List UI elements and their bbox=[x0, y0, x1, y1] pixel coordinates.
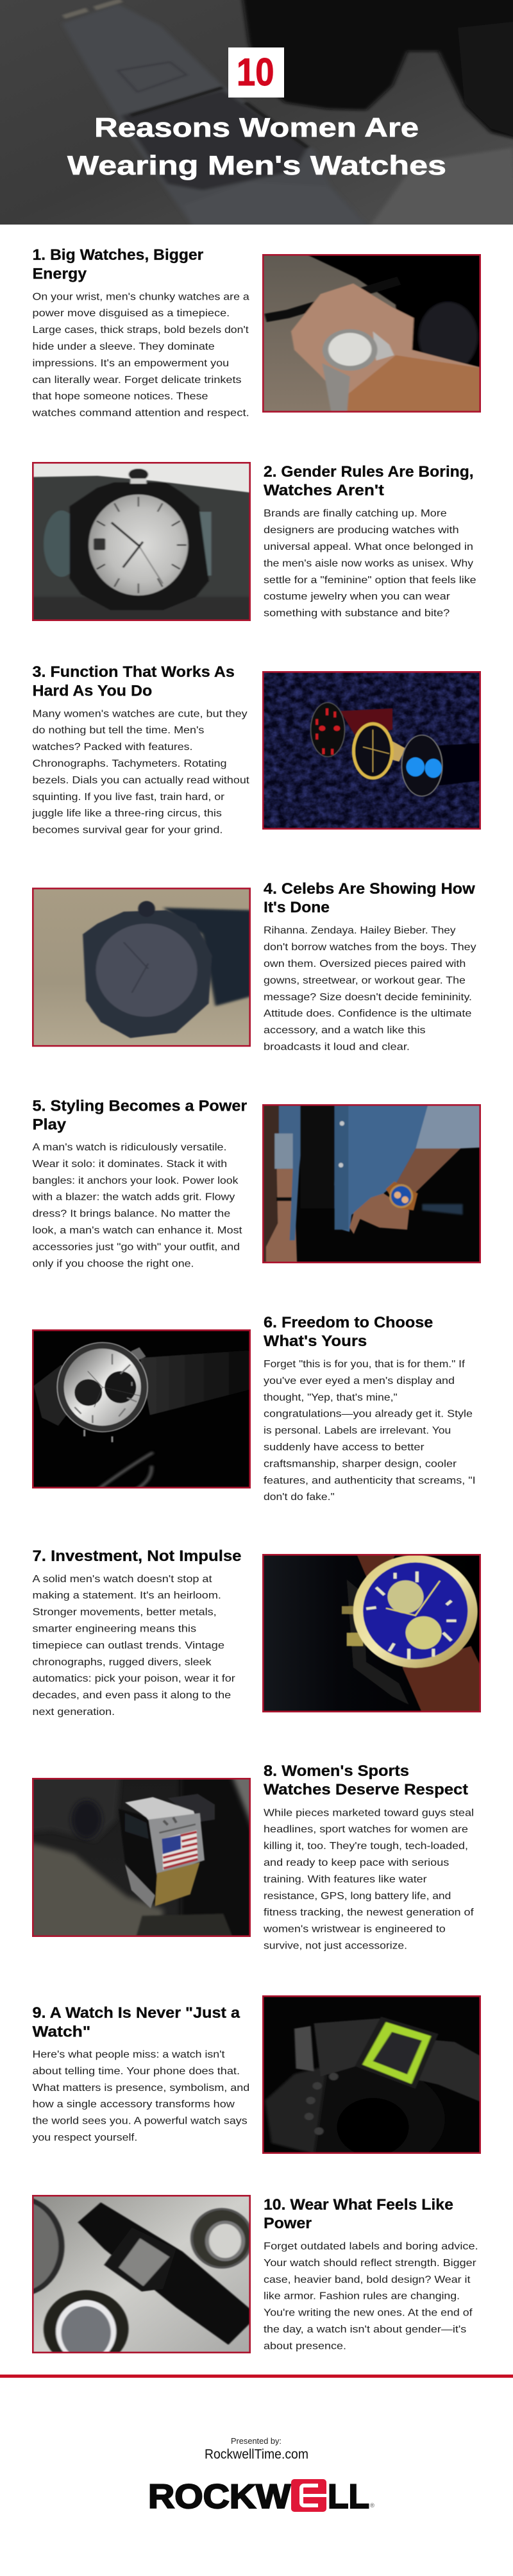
heading bbox=[264, 1762, 468, 1798]
heading: 2. Gender Rules Are Boring, bbox=[264, 463, 474, 481]
body text: about telling time. Your phone does that. bbox=[32, 2066, 240, 2077]
body text: next generation. bbox=[32, 1707, 115, 1718]
heading: Power bbox=[264, 2215, 312, 2232]
panel: reason 3 bbox=[31, 663, 484, 836]
photo: neon green square watch on gear bbox=[262, 1995, 484, 2172]
title bbox=[67, 112, 446, 180]
heading: What's Yours bbox=[264, 1333, 367, 1350]
body text: Wear it solo: it dominates. Stack it with bbox=[32, 1159, 227, 1170]
body text: is personal. Labels are irrelevant. You bbox=[264, 1426, 451, 1437]
body text: message? Size doesn't decide femininity. bbox=[264, 992, 472, 1003]
body text: women's wristwear is engineered to bbox=[263, 1924, 446, 1935]
body text: bezels. Dials you can actually read without bbox=[32, 775, 249, 786]
heading bbox=[32, 246, 203, 283]
body text: the men's aisle now works as unisex. Why bbox=[264, 558, 473, 569]
heading bbox=[264, 463, 474, 499]
heading bbox=[32, 2004, 240, 2040]
panel: reason 6 bbox=[32, 1314, 476, 1503]
body text: smarter engineering means this bbox=[32, 1623, 196, 1635]
body text: craftsmanship, sharper design, cooler bbox=[264, 1458, 457, 1469]
photo: gold watch with blue dial bbox=[262, 1554, 482, 1712]
panel: reason 2 bbox=[29, 459, 476, 626]
heading bbox=[264, 880, 475, 916]
body text: dress? It brings balance. No matter the bbox=[32, 1209, 230, 1220]
body text: own them. Oversized pieces paired with bbox=[264, 959, 466, 969]
heading: 10. Wear What Feels Like bbox=[264, 2196, 453, 2213]
body text bbox=[263, 1807, 474, 1952]
body text: Forget outdated labels and boring advice. bbox=[264, 2241, 478, 2252]
photo: wrist on motorcycle handlebar bbox=[262, 249, 487, 419]
body text bbox=[264, 1359, 476, 1503]
body text: hide under a sleeve. They dominate bbox=[32, 341, 215, 352]
body text: What matters is presence, symbolism, and bbox=[32, 2083, 249, 2094]
body text: While pieces marketed toward guys steal bbox=[264, 1807, 474, 1818]
body text: costume jewelry when you can wear bbox=[264, 592, 451, 602]
photo: chronograph with silver dial on black bbox=[32, 1329, 255, 1495]
body text: congratulations—you already get it. Style bbox=[264, 1409, 473, 1420]
body text: case, heavier band, bold design? Wear it bbox=[264, 2274, 471, 2285]
body text: the day, a watch isn't about gender—it's bbox=[264, 2324, 466, 2335]
body text: only if you choose the right one. bbox=[32, 1258, 194, 1269]
body text: On your wrist, men's chunky watches are a bbox=[32, 291, 249, 302]
body text: Chronographs. Tachymeters. Rotating bbox=[32, 758, 227, 769]
body text: juggle life like a three-ring circus, this bbox=[31, 808, 222, 819]
body text: gowns, streetwear, or workout gear. The bbox=[264, 975, 466, 986]
heading bbox=[264, 1314, 433, 1350]
icon: red E block bbox=[291, 2479, 326, 2512]
photo: black watch with silver dial bbox=[29, 459, 255, 626]
body text: how a single accessory transforms how bbox=[32, 2099, 235, 2110]
body text: watches? Packed with features. bbox=[31, 742, 193, 753]
hero banner bbox=[0, 0, 513, 226]
body text: headlines, sport watches for women are bbox=[264, 1824, 468, 1835]
logo: Rockwell wordmark: LL bbox=[328, 2478, 369, 2516]
footer: presented by: Presented by: bbox=[231, 2437, 282, 2446]
body text: chronographs, rugged divers, sleek bbox=[32, 1657, 212, 1668]
body text: becomes survival gear for your grind. bbox=[32, 825, 223, 836]
body text: settle for a "feminine" option that feels like bbox=[264, 575, 476, 586]
badge: number 10: 10 bbox=[237, 51, 274, 94]
body text: bangles: it anchors your look. Power look bbox=[32, 1175, 239, 1186]
body text: with a blazer: the watch adds grit. Flowy bbox=[31, 1192, 235, 1203]
heading bbox=[264, 2196, 453, 2232]
heading: 9. A Watch Is Never "Just a bbox=[32, 2004, 240, 2022]
heading: 5. Styling Becomes a Power bbox=[32, 1097, 247, 1114]
body text: power move disguised as a timepiece. bbox=[32, 308, 230, 319]
body text bbox=[32, 2049, 249, 2143]
body text: automatics: pick your poison, wear it for bbox=[32, 1673, 236, 1684]
body text: do nothing but tell the time. Men's bbox=[32, 725, 204, 736]
body text: making a statement. It's an heirloom. bbox=[32, 1591, 221, 1601]
body text: the world sees you. A powerful watch says bbox=[32, 2116, 248, 2127]
heading: Watches Aren't bbox=[264, 482, 384, 499]
heading: 6. Freedom to Choose bbox=[264, 1314, 433, 1331]
heading: It's Done bbox=[264, 899, 330, 916]
heading: 1. Big Watches, Bigger bbox=[32, 246, 203, 264]
body text: accessory, and a watch like this bbox=[264, 1025, 426, 1036]
body text: Forget "this is for you, that is for them." If bbox=[264, 1359, 465, 1370]
heading: 3. Function That Works As bbox=[32, 663, 235, 681]
panel: reason 7 bbox=[32, 1548, 482, 1718]
body text: suddenly have access to better bbox=[264, 1442, 425, 1453]
body text: Here's what people miss: a watch isn't bbox=[32, 2049, 225, 2060]
body text: impressions. It's an empowerment you bbox=[32, 358, 229, 369]
body text: Large cases, thick straps, bold bezels don't bbox=[32, 325, 249, 336]
photo: watch with American flag dial bbox=[24, 1770, 258, 1946]
logo: Rockwell wordmark bbox=[148, 2478, 374, 2516]
body text bbox=[264, 508, 476, 619]
body text: thought, "Yep, that's mine," bbox=[264, 1392, 398, 1403]
body text: timepiece can outlast trends. Vintage bbox=[32, 1640, 224, 1651]
body text: you respect yourself. bbox=[32, 2133, 137, 2143]
body text: A man's watch is ridiculously versatile. bbox=[32, 1142, 227, 1153]
heading: Energy bbox=[32, 266, 87, 283]
body text: can literally wear. Forget delicate trinkets bbox=[32, 375, 241, 386]
body text bbox=[32, 1574, 236, 1718]
heading: 4. Celebs Are Showing How bbox=[264, 880, 475, 898]
body text: you've ever eyed a men's display and bbox=[264, 1376, 455, 1386]
logo: Rockwell wordmark: ROCKW bbox=[148, 2478, 290, 2516]
body text: Many women's watches are cute, but they bbox=[32, 708, 248, 719]
body text: survive, not just accessorize. bbox=[264, 1940, 407, 1952]
heading: 7. Investment, Not Impulse bbox=[32, 1548, 241, 1565]
logo: Rockwell wordmark: ® bbox=[370, 2502, 374, 2509]
body text: training. With features like water bbox=[264, 1874, 427, 1885]
photo: black watch among gears bbox=[0, 2195, 258, 2367]
body text: Attitude does. Confidence is the ultimate bbox=[264, 1009, 472, 1019]
heading: Watch" bbox=[32, 2023, 90, 2040]
photo: dark navy watch on sand bbox=[32, 888, 255, 1047]
body text: like armor. Fashion rules are changing. bbox=[264, 2291, 460, 2302]
body text: that hope someone notices. These bbox=[32, 391, 208, 402]
panel: reason 8 bbox=[24, 1762, 474, 1952]
body text: and ready to keep pace with serious bbox=[264, 1857, 449, 1868]
body text bbox=[264, 925, 476, 1052]
heading bbox=[32, 663, 235, 700]
panel: reason 10 bbox=[0, 2195, 478, 2367]
body text bbox=[264, 2241, 478, 2351]
panel: reason 4 bbox=[32, 880, 476, 1052]
body text: Brands are finally catching up. More bbox=[264, 508, 447, 519]
body text bbox=[31, 708, 249, 836]
body text: killing it, too. They're tough, tech-loaded, bbox=[264, 1841, 468, 1852]
heading bbox=[32, 1097, 247, 1134]
body text: fitness tracking, the newest generation of bbox=[264, 1907, 474, 1918]
heading: 8. Women's Sports bbox=[264, 1762, 409, 1780]
body text: accessories just "go with" your outfit, and bbox=[32, 1241, 240, 1252]
body text: about presence. bbox=[264, 2341, 346, 2351]
body text: decades, and even pass it along to the bbox=[32, 1690, 231, 1701]
body text: universal appeal. What once belonged in bbox=[264, 542, 473, 552]
body text: Your watch should reflect strength. Bigger bbox=[264, 2258, 476, 2269]
footer: presented by bbox=[205, 2437, 308, 2462]
title: Wearing Men's Watches bbox=[67, 150, 446, 180]
heading: Watches Deserve Respect bbox=[264, 1781, 468, 1798]
body text: broadcasts it loud and clear. bbox=[264, 1042, 410, 1052]
body text: Rihanna. Zendaya. Hailey Bieber. They bbox=[264, 925, 455, 936]
body text: designers are producing watches with bbox=[264, 525, 459, 536]
photo: man in denim shirt with blue dial watch bbox=[260, 1102, 483, 1266]
body text bbox=[31, 291, 249, 419]
body text: resistance, GPS, long battery life, and bbox=[264, 1891, 451, 1902]
panel: reason 5 bbox=[31, 1097, 483, 1269]
body text: Stronger movements, better metals, bbox=[32, 1607, 217, 1618]
body text: don't borrow watches from the boys. They bbox=[264, 942, 476, 953]
body text: features, and authenticity that screams, "I bbox=[264, 1475, 476, 1486]
body text: something with substance and bite? bbox=[264, 608, 450, 619]
body text bbox=[31, 1142, 242, 1269]
body text: squinting. If you live fast, train hard, or bbox=[32, 792, 225, 803]
panel: reason 9 bbox=[32, 1995, 484, 2172]
body text: don't do fake." bbox=[264, 1492, 335, 1503]
red divider rule bbox=[0, 2375, 513, 2378]
body text: You're writing the new ones. At the end of bbox=[264, 2308, 473, 2319]
photo: three watches on dark rock bbox=[262, 671, 484, 830]
badge: number 10 bbox=[228, 47, 284, 98]
body text: look, a man's watch can enhance it. Most bbox=[32, 1225, 242, 1236]
title: Reasons Women Are bbox=[94, 112, 419, 142]
panel: reason 1 bbox=[31, 246, 487, 419]
footer: presented by: RockwellTime.com bbox=[205, 2447, 308, 2462]
heading: Hard As You Do bbox=[32, 683, 152, 700]
body text: watches command attention and respect. bbox=[31, 408, 249, 419]
body text: A solid men's watch doesn't stop at bbox=[32, 1574, 212, 1585]
heading: Play bbox=[32, 1116, 67, 1134]
